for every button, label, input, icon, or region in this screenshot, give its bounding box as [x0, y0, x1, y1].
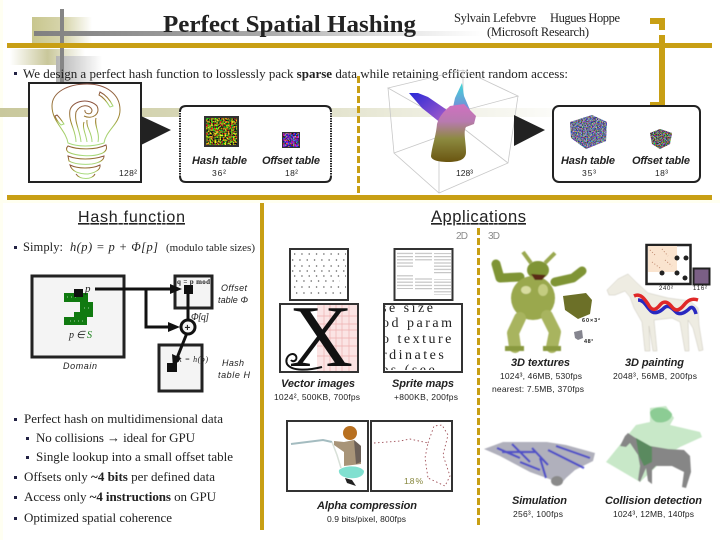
- dot table thumbnail: [290, 249, 348, 300]
- offset table caption: [262, 155, 320, 178]
- horse figure: [607, 274, 703, 351]
- sprite text thumbnail: od param: [382, 316, 454, 331]
- domain box: [32, 276, 124, 371]
- hash table caption: Hash table: [561, 155, 615, 167]
- feature bullets: Access only ~4 instructions on GPU: [24, 489, 217, 504]
- offset table caption: 18²: [285, 168, 298, 178]
- arrow: 2D input to tables: [141, 116, 171, 145]
- panel: 2D hash and offset tables: [180, 106, 331, 182]
- hash table caption: Hash table: [192, 155, 247, 167]
- caption: +800KB, 200fps: [394, 392, 458, 402]
- table thumbnail: [394, 249, 452, 300]
- size label: 128²: [119, 168, 137, 178]
- plus node: +: [184, 323, 190, 334]
- feature bullets: Perfect hash on multidimensional data: [24, 411, 223, 426]
- offset table box: Offset: [221, 283, 247, 293]
- hash table caption: 36²: [212, 168, 226, 178]
- hash table box: Hash: [222, 358, 244, 368]
- formula line: Simply:: [23, 240, 63, 254]
- heading: hash function: Hash function: [78, 209, 185, 226]
- size label: 128³: [456, 168, 473, 178]
- caption: [316, 500, 417, 524]
- photo: alpha outline: 1.8 %: [404, 476, 423, 486]
- caption: 256³, 100fps: [513, 509, 563, 519]
- caption: Sprite maps: [392, 378, 454, 390]
- caption: 1024³, 46MB, 530fps: [500, 371, 582, 381]
- application: vector images: [274, 249, 360, 402]
- application: 3D textures: [492, 252, 600, 394]
- hash table caption: [192, 155, 247, 178]
- offset cube: [574, 330, 583, 340]
- caption: 2048³, 56MB, 200fps: [613, 371, 697, 381]
- caption: [274, 378, 360, 402]
- caption: 0.9 bits/pixel, 800fps: [327, 514, 406, 524]
- offset table caption: 18³: [655, 168, 668, 178]
- application: 3D painting: [607, 245, 710, 381]
- authors: Hugues Hoppe: [550, 11, 620, 25]
- offset table caption: Offset table: [262, 155, 320, 167]
- title: Perfect Spatial Hashing: [163, 12, 416, 38]
- caption: [605, 495, 702, 519]
- plus node: [181, 320, 195, 334]
- inset: texture tables: [646, 245, 710, 292]
- application: alpha compression: [287, 421, 452, 524]
- caption: [392, 378, 458, 402]
- formula line: h(p) = p + Φ[p]: [70, 240, 158, 254]
- caption: Simulation: [512, 495, 567, 507]
- dragon figure: [496, 252, 582, 351]
- label: 2D column: 2D: [456, 231, 468, 242]
- 3D bunny volume: [388, 70, 518, 193]
- feature bullets: Single lookup into a small offset table: [36, 449, 233, 464]
- large X thumbnail: X: [289, 289, 353, 386]
- caption: 3D painting: [625, 357, 684, 369]
- heading: applications: Applications: [431, 208, 526, 226]
- inset: texture tables: 240²: [659, 286, 673, 292]
- caption: nearest: 7.5MB, 370fps: [492, 384, 584, 394]
- panel: 2D lightbulb input: [29, 83, 141, 182]
- car figure: [484, 442, 595, 486]
- domain box: p: [84, 283, 91, 295]
- photo: alpha outline: [371, 421, 452, 491]
- hash table image: [204, 116, 239, 147]
- offset cube: [650, 129, 672, 149]
- panel: 3D hash and offset tables: [553, 106, 700, 182]
- sprite text thumbnail: es (see: [382, 363, 437, 378]
- authors: (Microsoft Research): [487, 25, 589, 39]
- caption: 3D textures: [511, 357, 570, 369]
- offset cube size: 48³: [584, 338, 593, 345]
- icon: lightbulb: [52, 84, 120, 178]
- feature bullets: No collisions → ideal for GPU: [36, 430, 196, 445]
- sprite text thumbnail: o texture: [382, 332, 454, 347]
- offset table box: q = p mod: [177, 278, 210, 286]
- offset table box: [175, 276, 248, 308]
- caption: [613, 357, 697, 381]
- caption: Alpha compression: [316, 500, 417, 512]
- application: sprite maps: [381, 249, 462, 402]
- offset table image: [282, 132, 300, 148]
- caption: Vector images: [281, 378, 355, 390]
- hash cube size: 60×3²: [582, 317, 600, 324]
- domain box: Domain: [63, 361, 97, 371]
- hash cube: [563, 293, 592, 319]
- hash table caption: [561, 155, 615, 178]
- caption: 1024², 500KB, 700fps: [274, 392, 360, 402]
- hash table box: k = h(p): [178, 355, 208, 364]
- domain box: p ∈ S: [68, 330, 92, 341]
- feature bullets: [14, 411, 233, 525]
- offset table box: table Φ: [218, 295, 248, 305]
- application: collision detection: [605, 406, 702, 519]
- caption: 1024³, 12MB, 140fps: [613, 509, 694, 519]
- caption: [492, 357, 584, 394]
- photo: child with hose: [287, 421, 368, 491]
- hash table caption: 35³: [582, 168, 596, 178]
- formula line: (modulo table sizes): [166, 242, 255, 254]
- feature bullets: Offsets only ~4 bits per defined data: [24, 469, 215, 484]
- blue paint stroke: [638, 300, 696, 314]
- offset table caption: Offset table: [632, 155, 690, 167]
- caption: Collision detection: [605, 495, 702, 507]
- offset lookup label: Φ[q]: [191, 312, 209, 323]
- sprite text thumbnail: rdinates: [382, 348, 446, 363]
- arrow: 3D input to tables: [514, 115, 545, 146]
- offset table caption: [632, 155, 690, 178]
- hash cube: [570, 115, 607, 149]
- caption: [512, 495, 567, 519]
- hash table box: [159, 345, 250, 391]
- feature bullets: Optimized spatial coherence: [24, 510, 172, 525]
- green collision plane and horse: [606, 406, 702, 488]
- label: 3D column: 3D: [488, 231, 500, 242]
- authors: Sylvain Lefebvre: [454, 11, 536, 25]
- arrows: [95, 284, 188, 368]
- red paint stroke: [634, 295, 698, 310]
- inset: texture tables: 116²: [693, 286, 707, 292]
- sprite text thumbnail: [383, 303, 463, 373]
- intro bullet text: We design a perfect hash function to losslessly pack sparse data while retaining efficient random access:: [23, 66, 568, 81]
- hash table box: table H: [218, 370, 250, 380]
- sprite text thumbnail: se size: [381, 301, 435, 316]
- authors: [454, 11, 620, 39]
- diagram: hash function: [32, 276, 250, 391]
- application: simulation: [484, 442, 595, 519]
- formula line: [14, 240, 255, 254]
